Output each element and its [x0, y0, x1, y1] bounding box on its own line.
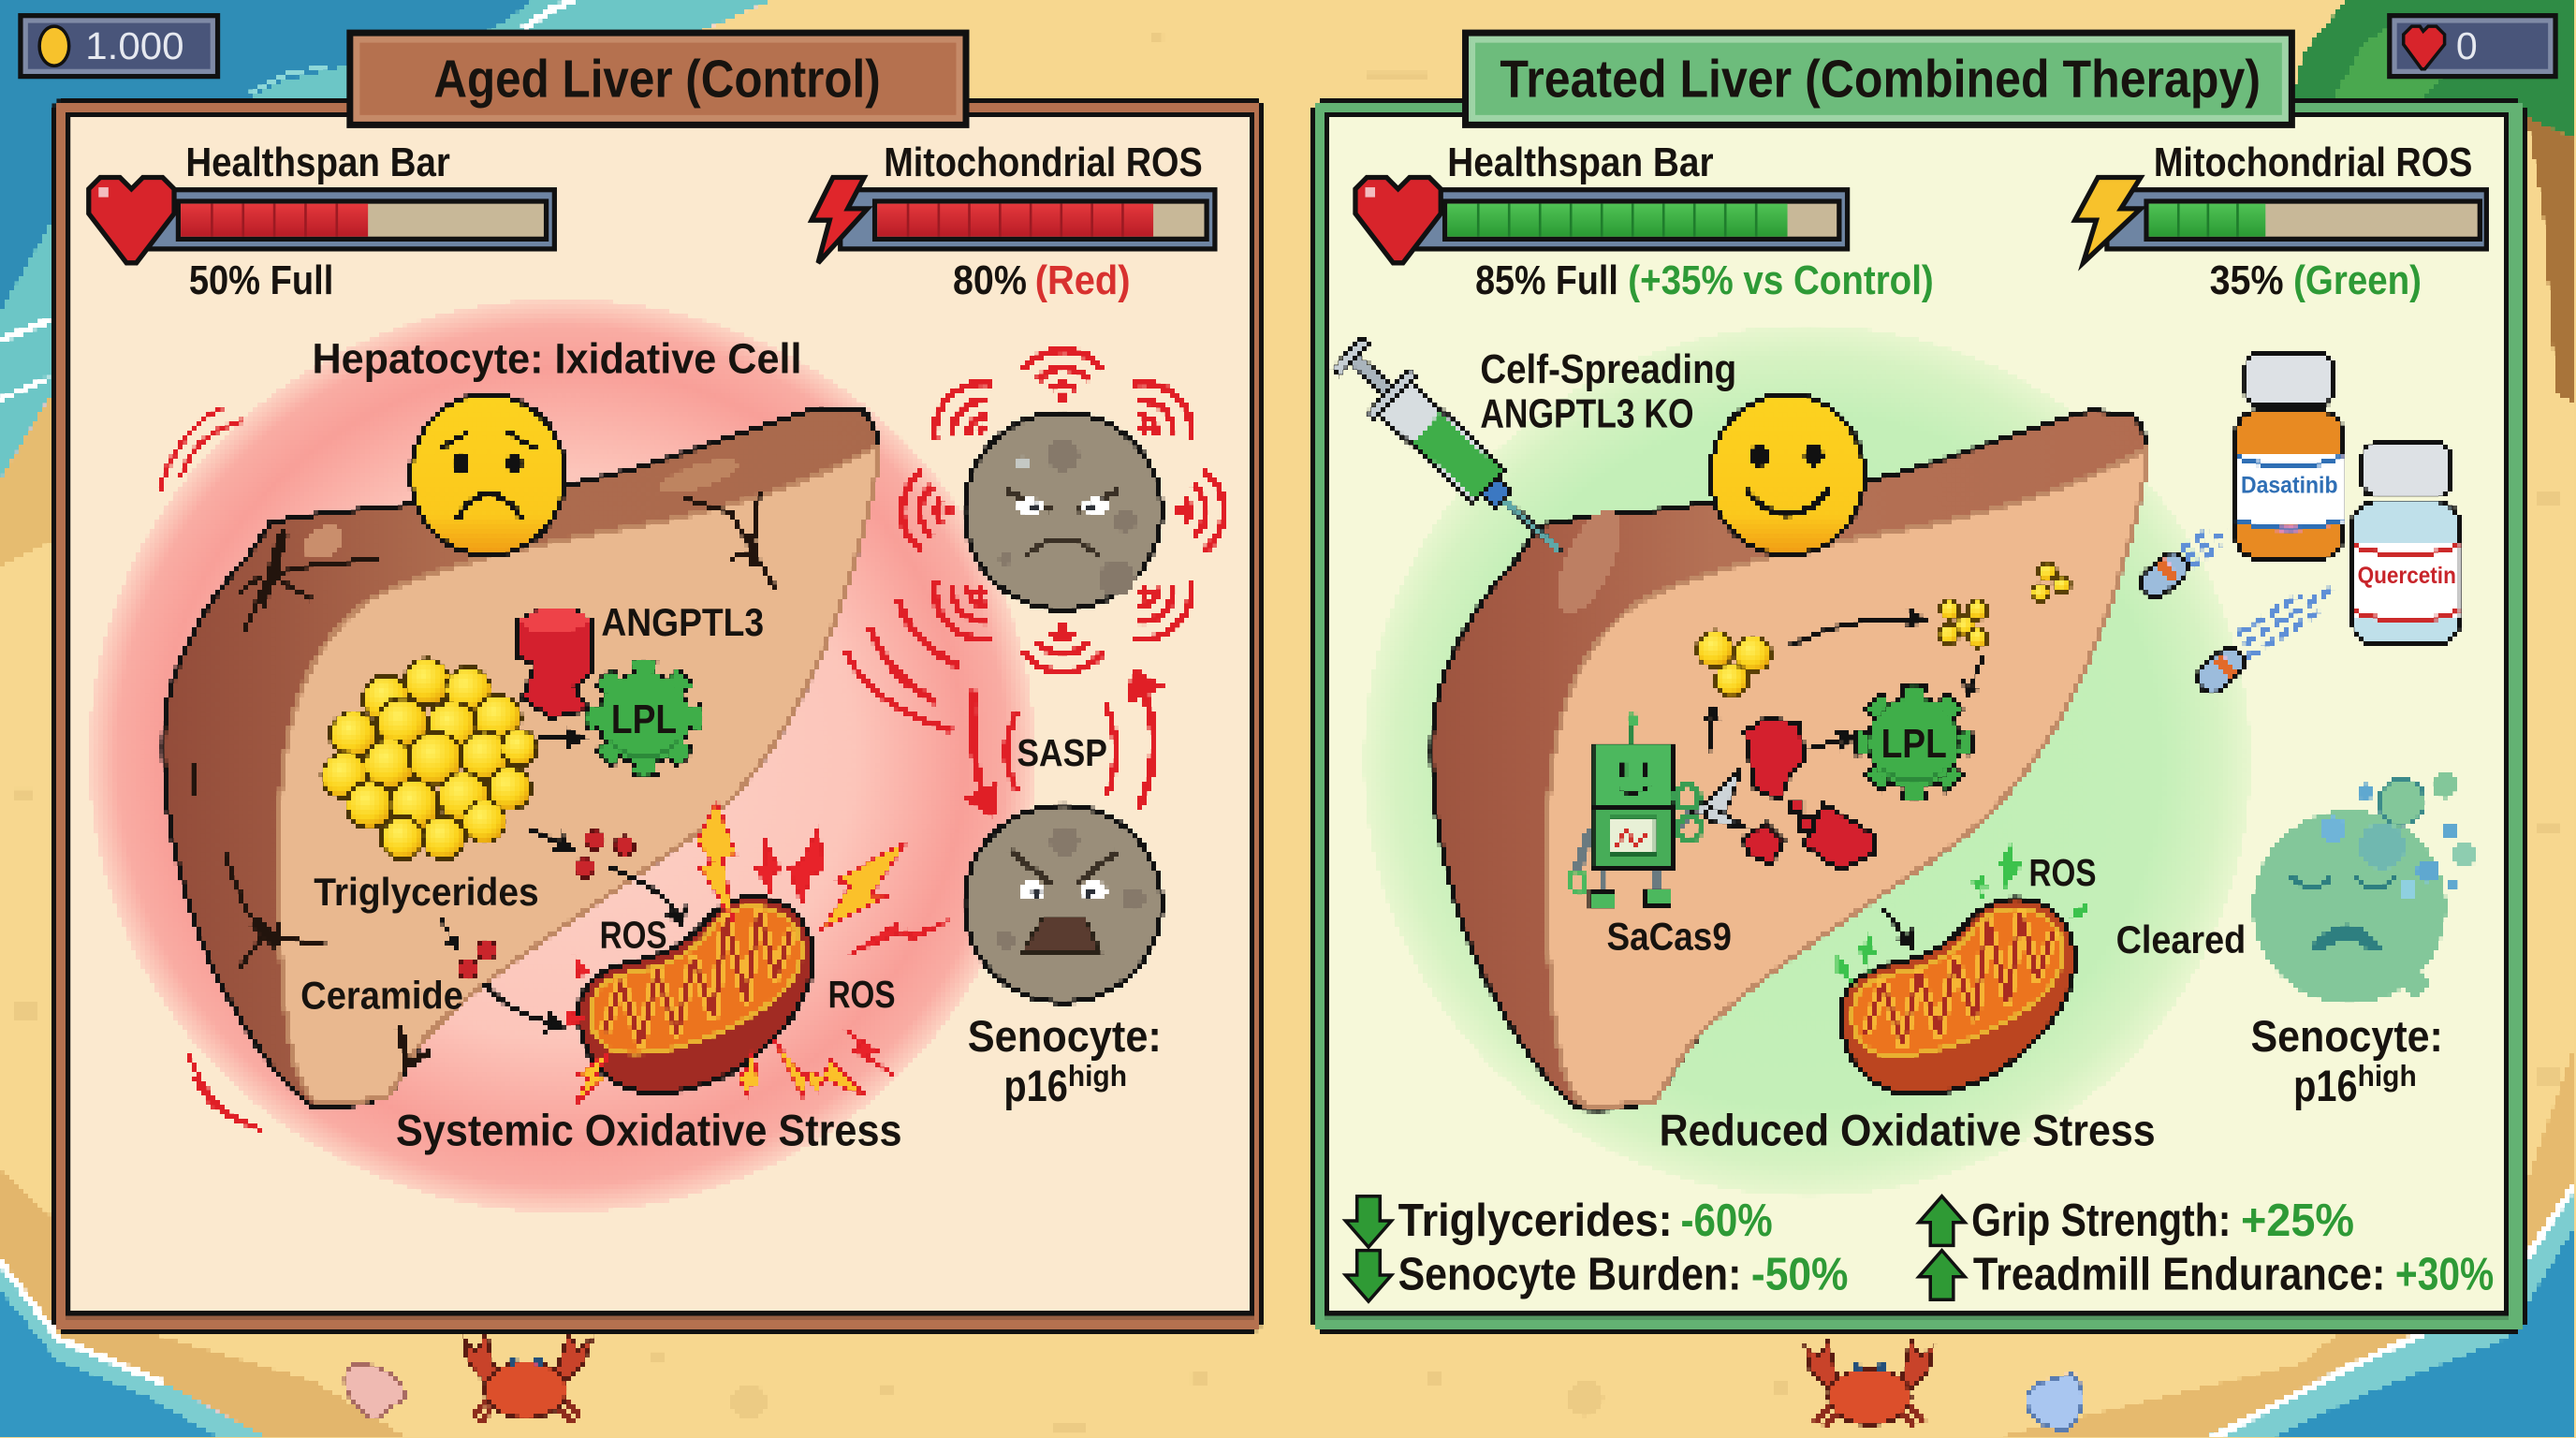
- HUD counters: [18, 13, 2558, 79]
- arrow up: [1919, 1196, 1965, 1245]
- lives counter badge: [2387, 13, 2558, 79]
- LPL gear: [1863, 692, 1965, 794]
- label cleared: Cleared: [2116, 917, 2246, 961]
- liver: [164, 407, 879, 1107]
- healthspan value: (+35% vs Control): [1628, 257, 1934, 303]
- crab right: [1806, 1341, 1934, 1426]
- label senocyte: p16: [2293, 1062, 2358, 1111]
- coin icon: [39, 26, 69, 66]
- signal waves: [901, 350, 1224, 672]
- happy face: [1710, 394, 1865, 555]
- SaCas9 robot: [1570, 713, 1692, 909]
- green ROS sparks: [1837, 838, 2111, 986]
- label ROS: ROS: [2029, 851, 2097, 894]
- arrow down: [1345, 1251, 1392, 1301]
- green healing glow: [1364, 326, 2250, 1196]
- ROS value: (Green): [2293, 257, 2422, 303]
- pathway arrows: [439, 738, 681, 1025]
- liver cracks: [194, 493, 775, 1064]
- label LPL: LPL: [611, 697, 677, 742]
- heart icon: [2404, 26, 2445, 69]
- label ROS: ROS: [600, 914, 667, 957]
- label self-spreading: [1480, 346, 1736, 436]
- arrow up: [1919, 1251, 1965, 1299]
- label ceramide: Ceramide: [300, 974, 463, 1018]
- label reduced oxidative stress: Reduced Oxidative Stress: [1660, 1106, 2156, 1155]
- ROS bar: [2104, 187, 2489, 252]
- label Dasatinib: Dasatinib: [2241, 474, 2338, 499]
- ROS lightning bolts: [567, 800, 949, 1104]
- coin counter badge: 1.000: [85, 24, 184, 67]
- healthspan bar: [1412, 187, 1850, 252]
- stat: triglycerides: Triglycerides:: [1398, 1196, 1673, 1246]
- label senocyte: [968, 1012, 1162, 1111]
- palm tree: [2291, 0, 2576, 403]
- label ROS right: ROS: [828, 973, 896, 1016]
- label systemic oxidative stress: Systemic Oxidative Stress: [396, 1106, 902, 1155]
- motion lines: [159, 407, 263, 1131]
- ROS bar: [838, 187, 1218, 252]
- fat clusters shrinking: [1697, 563, 2070, 697]
- mitochondrion healthy: [1840, 899, 2075, 1094]
- lightning icon red: [812, 178, 868, 263]
- lightning icon yellow: [2075, 178, 2141, 263]
- stat: senocyte burden: -50%: [1751, 1250, 1848, 1300]
- panel: treated liver combined therapy: [1311, 30, 2526, 1332]
- ROS label: Mitochondrial ROS: [2154, 139, 2472, 185]
- label senocyte: Senocyte:: [2250, 1012, 2443, 1062]
- stat: treadmill endurance: Treadmill Endurance:: [1973, 1250, 2385, 1300]
- stat: triglycerides: -60%: [1680, 1196, 1773, 1246]
- lipid droplets: [459, 829, 634, 979]
- healthspan value: 85% Full: [1475, 257, 1618, 303]
- ANGPTL3 protein block: [518, 609, 592, 718]
- mitochondrial ROS gauge: [2075, 139, 2489, 303]
- scissors: [1676, 769, 1748, 840]
- healthspan gauge: [89, 139, 557, 303]
- LPL gear: [593, 668, 695, 769]
- panel art: aged liver scene: [51, 98, 1265, 1332]
- ROS value: 35%: [2210, 257, 2284, 303]
- mitochondrial ROS gauge: [812, 139, 1218, 303]
- label self-spreading: Celf-Spreading: [1480, 346, 1736, 392]
- senocyte angry top: [964, 413, 1162, 609]
- title plaque: aged liver: [346, 30, 970, 128]
- stat: grip strength: +25%: [2241, 1196, 2354, 1246]
- red stress glow: [89, 299, 1035, 1212]
- sad face: [411, 394, 565, 555]
- label SASP: SASP: [1017, 731, 1107, 774]
- label senocyte: high: [1068, 1059, 1127, 1093]
- stat: grip strength: Grip Strength:: [1971, 1196, 2231, 1246]
- stat: senocyte burden: Senocyte Burden:: [1398, 1250, 1741, 1300]
- label triglycerides: Triglycerides: [314, 870, 539, 914]
- label Quercetin: Quercetin: [2358, 564, 2456, 589]
- title text: Treated Liver (Combined Therapy): [1500, 50, 2261, 109]
- ROS value: (Red): [1035, 257, 1131, 303]
- Dasatinib bottle: [2236, 353, 2343, 559]
- Quercetin bottle: [2352, 444, 2459, 644]
- coin counter badge: [18, 13, 220, 79]
- healthspan label: Healthspan Bar: [185, 139, 450, 185]
- crab left: [463, 1334, 592, 1423]
- panel labels: [1345, 30, 2494, 1301]
- healthspan label: Healthspan Bar: [1447, 139, 1714, 185]
- label senocyte: [2250, 1012, 2443, 1111]
- label SaCas9: SaCas9: [1606, 914, 1732, 958]
- label senocyte: Senocyte:: [968, 1012, 1162, 1062]
- syringe: [1325, 330, 1581, 575]
- label LPL: LPL: [1881, 721, 1947, 767]
- lives counter badge: 0: [2456, 24, 2478, 67]
- senocyte dissolving: [2252, 772, 2478, 1004]
- shell left: [345, 1365, 406, 1419]
- hepatocyte heading: Hepatocyte: Ixidative Cell: [312, 334, 801, 382]
- label senocyte: p16: [1003, 1062, 1068, 1111]
- shell right: [2027, 1373, 2083, 1431]
- label self-spreading: ANGPTL3 KO: [1480, 390, 1694, 436]
- pill capsules: [2134, 529, 2333, 699]
- stat: triglycerides: [1345, 1196, 1773, 1247]
- title text: Aged Liver (Control): [433, 50, 881, 109]
- healthspan value: 50% Full: [189, 257, 333, 303]
- arrow down: [1345, 1196, 1392, 1247]
- stat: treadmill endurance: +30%: [2395, 1250, 2494, 1300]
- heart icon: [1355, 178, 1441, 263]
- panel: aged liver control: [51, 30, 1265, 1332]
- senocyte angry bottom: [964, 805, 1162, 1003]
- liver: [1432, 411, 2147, 1109]
- mitochondrion stressed: [578, 897, 813, 1093]
- panel art: treated liver scene: [1311, 98, 2526, 1332]
- SASP arcs and arrows: [846, 600, 1154, 809]
- label ANGPTL3: ANGPTL3: [601, 600, 764, 644]
- triglyceride fat cluster: [322, 659, 537, 859]
- healthspan gauge: [1355, 139, 1934, 303]
- label senocyte: high: [2358, 1059, 2417, 1093]
- ROS value: 80%: [953, 257, 1027, 303]
- pathway arrows: [1708, 619, 1983, 946]
- ROS label: Mitochondrial ROS: [884, 139, 1203, 185]
- healthspan bar: [139, 187, 557, 252]
- heart icon: [89, 178, 174, 263]
- panel labels: [89, 30, 1218, 1155]
- ANGPTL3 fragments: [1743, 718, 1875, 871]
- title plaque: treated liver: [1462, 30, 2295, 128]
